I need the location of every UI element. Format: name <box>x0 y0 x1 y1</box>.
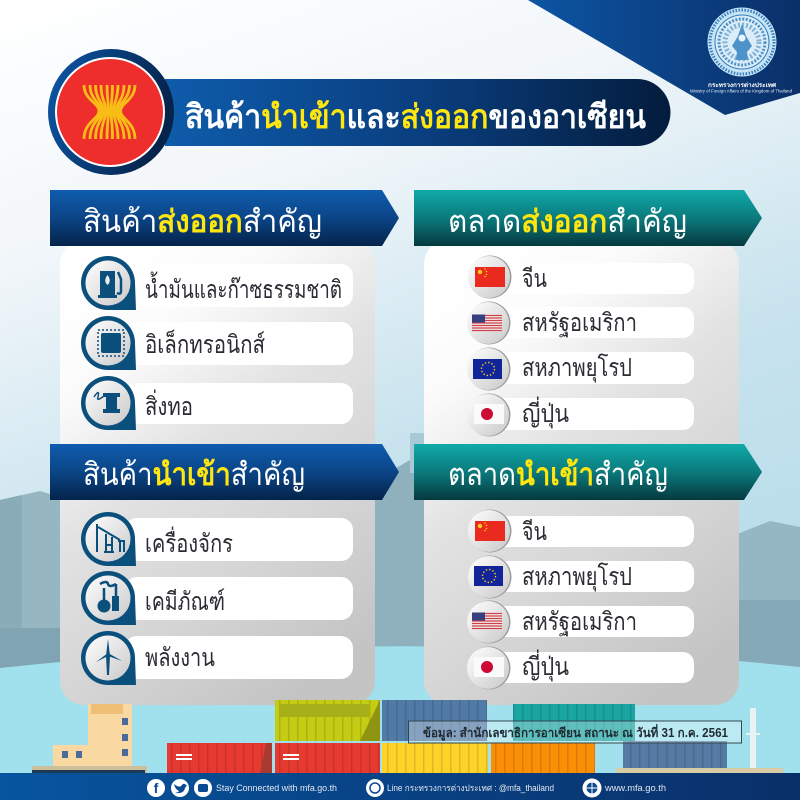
export market: EU: สหภาพยุโรป <box>522 353 632 383</box>
icon: youtube <box>194 779 212 797</box>
import item: energy <box>81 631 353 685</box>
export market: USA <box>467 302 694 344</box>
import market: EU <box>468 556 694 598</box>
export market: China: จีน <box>522 265 547 293</box>
header: import markets <box>414 444 762 500</box>
header: export markets <box>414 190 762 246</box>
import item: energy: พลังงาน <box>145 644 215 672</box>
export item: oil and gas <box>81 256 353 310</box>
import item: chemicals: เคมีภัณฑ์ <box>145 588 225 616</box>
footer text: line account: Line กระทรวงการต่างประเทศ : @mfa_thailand <box>387 783 554 793</box>
header: export markets: ตลาดส่งออกสำคัญ <box>448 204 687 239</box>
footer bar <box>0 773 800 800</box>
export item: textiles: สิ่งทอ <box>145 389 193 421</box>
header: import markets: ตลาดนำเข้าสำคัญ <box>448 457 668 492</box>
ministry name: กระทรวงการต่างประเทศ <box>708 81 776 89</box>
header: main imports <box>50 444 399 500</box>
port scenery: containers and buildings <box>32 700 783 773</box>
import market: China: จีน <box>522 518 547 546</box>
export market: EU <box>467 348 694 390</box>
source note <box>408 721 742 743</box>
footer text: website: www.mfa.go.th <box>604 783 666 793</box>
title text: สินค้านำเข้าและส่งออกของอาเซียน <box>185 98 646 135</box>
ministry english name: Ministry of Foreign Affairs of the Kingdom of Thailand <box>690 88 792 94</box>
export item: textiles <box>81 376 353 430</box>
title bar <box>165 79 670 146</box>
icon: globe <box>582 778 602 798</box>
import market: Japan: ญี่ปุ่น <box>522 649 569 682</box>
import market: EU: สหภาพยุโรป <box>522 562 632 592</box>
export item: electronics <box>81 316 353 370</box>
icon: line <box>366 779 384 797</box>
footer text: stay connected: Stay Connected with mfa.go.th <box>216 783 337 793</box>
header: main exports: สินค้าส่งออกสำคัญ <box>83 204 322 239</box>
header: main imports: สินค้านำเข้าสำคัญ <box>83 457 305 492</box>
export item: oil and gas: น้ำมันและก๊าซธรรมชาติ <box>145 271 342 304</box>
import market: USA <box>467 600 694 644</box>
export market: Japan: ญี่ปุ่น <box>522 396 569 429</box>
ministry seal <box>708 8 776 76</box>
export market: China <box>468 256 694 298</box>
ASEAN emblem <box>48 49 174 175</box>
panel: left <box>60 240 375 705</box>
source note: ข้อมูล: สำนักเลขาธิการอาเซียน สถานะ ณ วันที่ 31 ก.ค. 2561 <box>423 724 728 741</box>
icon: facebook: f <box>154 780 159 796</box>
import item: machinery: เครื่องจักร <box>145 526 233 558</box>
icon: twitter <box>171 779 189 797</box>
top-right ministry banner <box>528 0 800 115</box>
icon: facebook <box>147 779 165 797</box>
import item: chemicals <box>81 571 353 625</box>
export market: Japan <box>467 394 694 436</box>
header: main exports <box>50 190 399 246</box>
import market: China <box>468 510 694 552</box>
export market: USA: สหรัฐอเมริกา <box>522 309 637 337</box>
panel: right <box>424 240 739 705</box>
import market: Japan <box>467 646 694 690</box>
import market: USA: สหรัฐอเมริกา <box>522 608 637 636</box>
export item: electronics: อิเล็กทรอนิกส์ <box>145 329 265 359</box>
import item: machinery <box>81 512 353 566</box>
